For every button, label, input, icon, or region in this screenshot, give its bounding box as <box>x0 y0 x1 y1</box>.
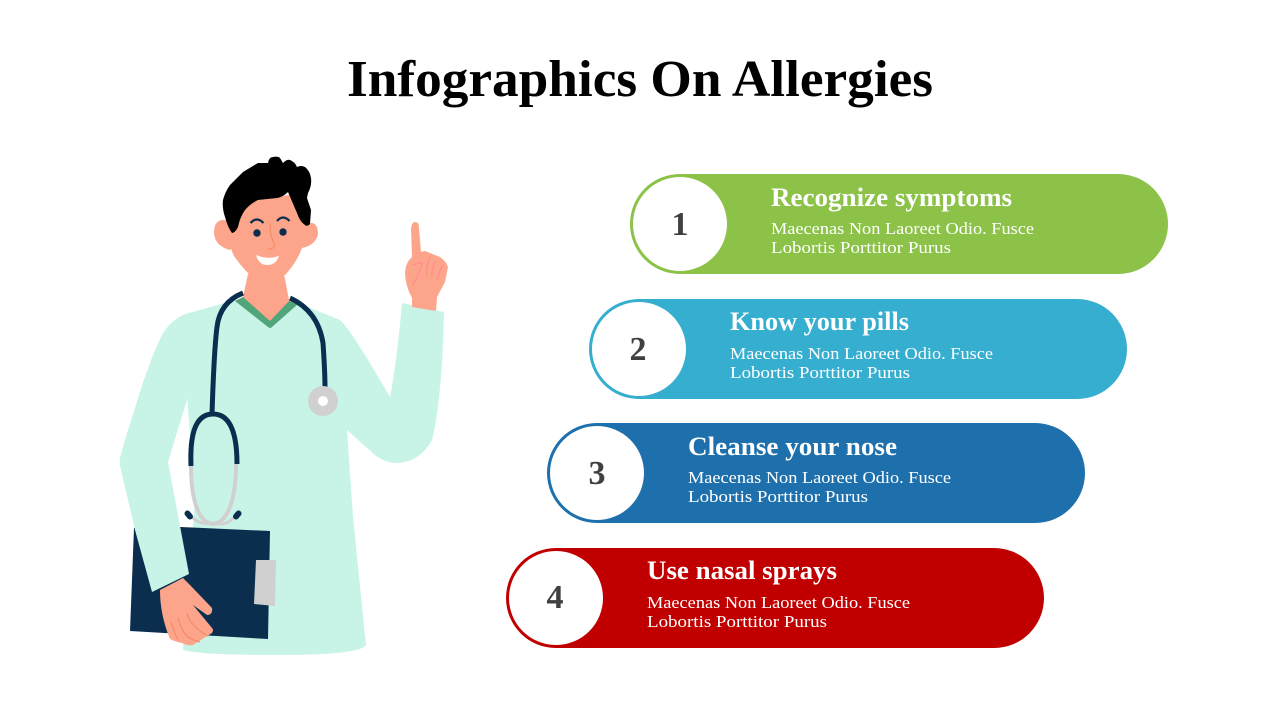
step 1: Lobortis Porttitor Purus <box>771 238 951 257</box>
collar <box>235 297 298 328</box>
step 2 <box>589 299 1127 399</box>
palm lines <box>413 257 443 285</box>
step 1 text: Maecenas Non Laoreet Odio. Fusce <box>771 219 1034 238</box>
smile <box>256 255 279 265</box>
step 1 number circle <box>633 177 727 271</box>
hand finger lines <box>171 613 208 642</box>
step 2 pill <box>589 299 1127 399</box>
step 3 <box>547 423 1085 523</box>
step 1 <box>630 174 1168 274</box>
ears <box>214 220 240 250</box>
step 1 pill <box>630 174 1168 274</box>
step 4 text: Maecenas Non Laoreet Odio. Fusce <box>647 593 910 612</box>
step 4: Lobortis Porttitor Purus <box>647 612 827 631</box>
neck <box>235 274 298 328</box>
step 4 <box>506 548 1044 648</box>
clipboard clip <box>254 560 276 606</box>
hair <box>223 157 311 233</box>
step 4 heading: Use nasal sprays <box>647 556 837 585</box>
stethoscope earpieces <box>188 514 238 516</box>
clipboard <box>130 527 270 639</box>
stethoscope chest piece <box>308 386 338 416</box>
raised hand <box>405 222 448 311</box>
eyebrows <box>250 218 290 223</box>
doctor coat body <box>183 300 444 655</box>
step 2 number: 2 <box>630 331 646 368</box>
step 3 number circle <box>550 426 644 520</box>
step 4 number circle <box>509 551 603 645</box>
left arm <box>120 312 193 592</box>
stethoscope tube <box>191 293 325 524</box>
step 3 number: 3 <box>588 455 606 492</box>
step 3 text: Maecenas Non Laoreet Odio. Fusce <box>688 468 951 487</box>
step 3: Lobortis Porttitor Purus <box>688 487 868 506</box>
step 1 heading: Recognize symptoms <box>771 183 1012 212</box>
illustration: doctor <box>120 157 448 655</box>
title: Infographics On Allergies <box>347 51 933 108</box>
step 3 pill <box>547 423 1085 523</box>
step 3 heading: Cleanse your nose <box>688 432 897 461</box>
step 2 text: Maecenas Non Laoreet Odio. Fusce <box>730 344 993 363</box>
eyes <box>253 229 261 237</box>
nose <box>268 223 274 249</box>
step 1 number: 1 <box>672 206 688 243</box>
step 4 pill <box>506 548 1044 648</box>
face <box>229 192 306 282</box>
step 2: Lobortis Porttitor Purus <box>730 363 910 382</box>
step 4 number: 4 <box>546 579 564 616</box>
lower hand <box>160 578 213 645</box>
step 2 heading: Know your pills <box>730 307 909 336</box>
step 2 number circle <box>592 302 686 396</box>
